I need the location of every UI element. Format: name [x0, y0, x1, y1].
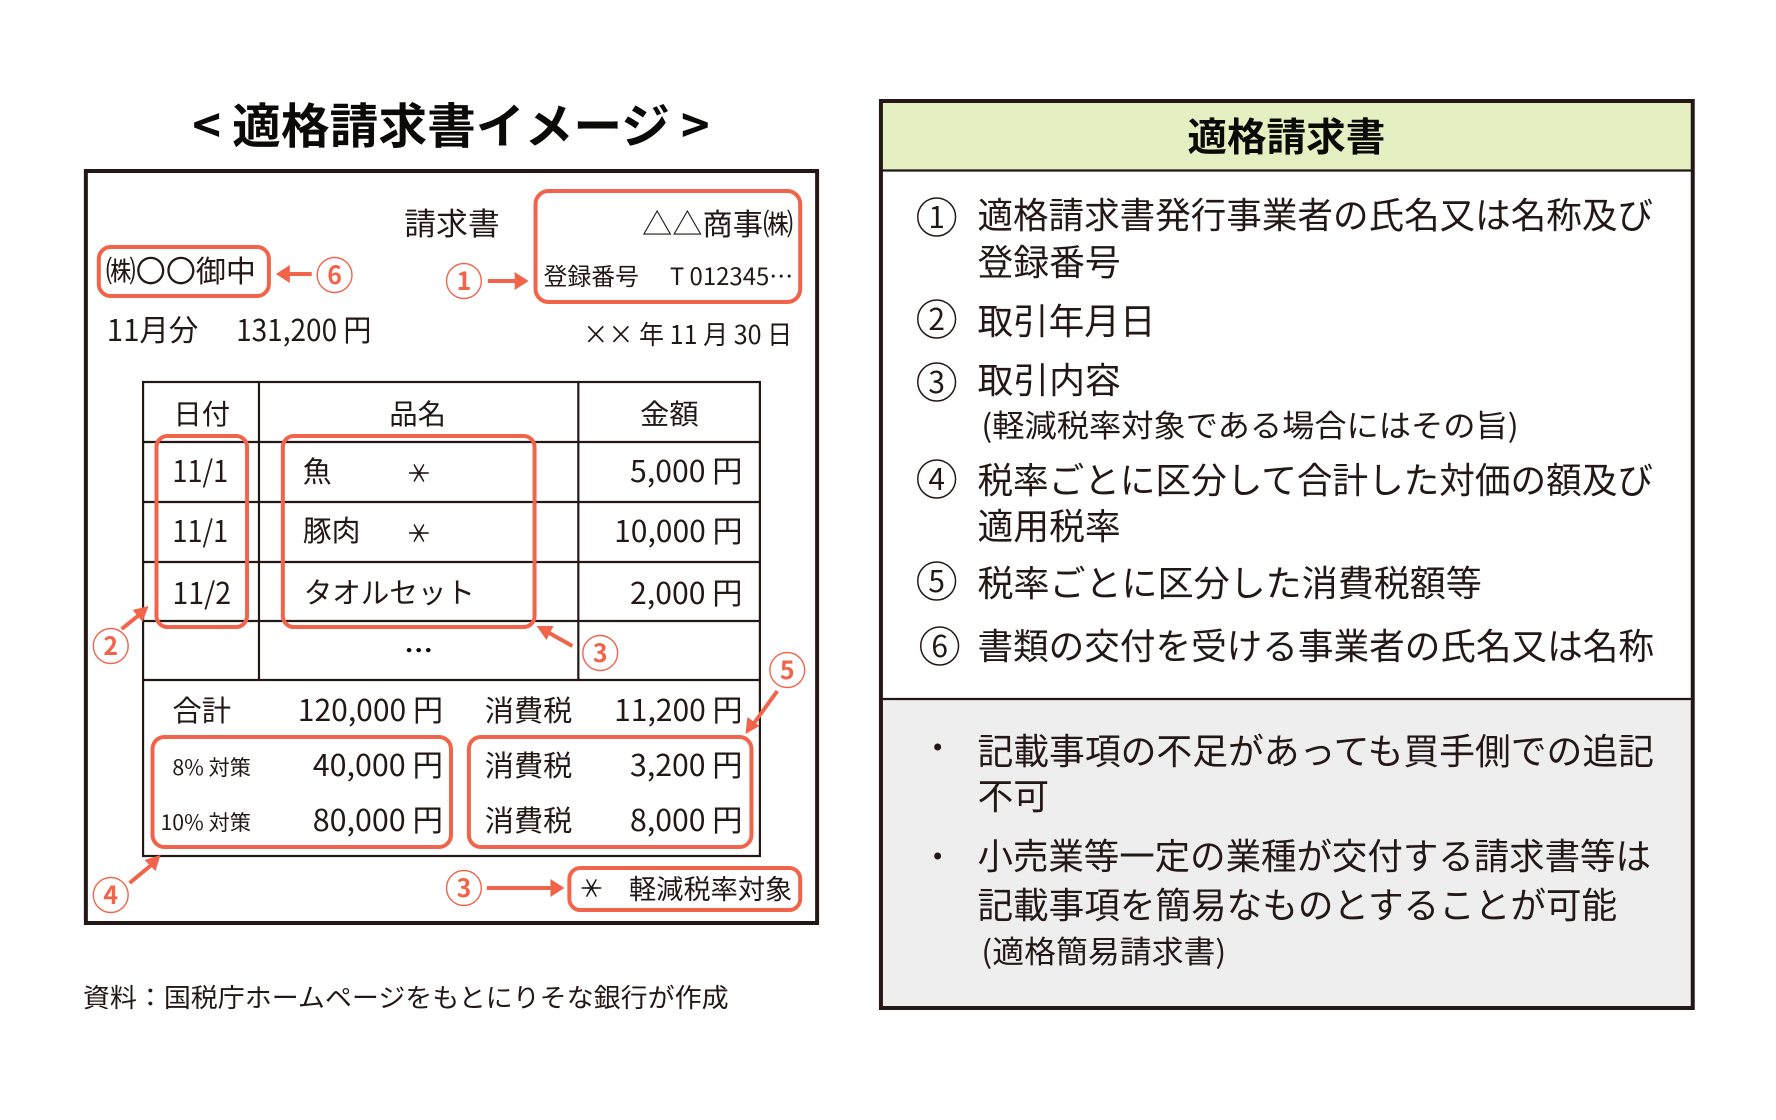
list item 6: 書類の交付を受ける事業者の氏名又は名称	[977, 618, 1654, 670]
table header	[173, 393, 699, 433]
table amounts	[614, 447, 742, 613]
invoice heading: 請求書	[404, 199, 500, 244]
arrow and marker 4: 4	[103, 876, 118, 912]
totals row: 11,200 円	[614, 686, 742, 730]
bullet note 2: 小売業等一定の業種が交付する請求書等は	[977, 828, 1651, 880]
callout box: issuer and registration number	[536, 191, 800, 302]
callout box: taxable amount by rate: 10% 対策	[160, 807, 251, 837]
table header: 日付	[173, 393, 230, 433]
callout box: issuer and registration number: 登録番号	[544, 257, 639, 292]
totals row	[172, 686, 742, 730]
bullet note 1: 不可	[977, 768, 1049, 820]
list item 2: 2	[928, 295, 945, 339]
table amounts: 10,000 円	[614, 507, 742, 551]
arrow and marker 2	[93, 606, 149, 664]
bullet note 1	[934, 723, 1654, 820]
panel: requirements	[881, 101, 1693, 1008]
table dates: 11/2	[172, 569, 231, 613]
table amounts: 5,000 円	[630, 447, 742, 491]
bullet note 1: 記載事項の不足があっても買手側での追記	[977, 723, 1654, 775]
callout box: issuer and registration number: △△商事㈱	[642, 200, 793, 244]
callout box: transaction dates	[157, 436, 247, 627]
callout box: addressee: ㈱〇〇御中	[106, 247, 256, 291]
panel grey section	[881, 699, 1693, 1008]
list item 2: 取引年月日	[977, 293, 1156, 345]
list item 3	[918, 352, 1519, 446]
arrow and marker 3 lower: 3	[457, 869, 471, 905]
list item 4: 適用税率	[977, 498, 1121, 550]
callout box: taxable amount by rate	[153, 737, 451, 847]
table header: 金額	[640, 393, 699, 433]
list item 3: 取引内容	[977, 352, 1121, 404]
callout box: taxable amount by rate: 8% 対策	[172, 752, 251, 782]
callout box: taxable amount by rate: 80,000 円	[313, 796, 443, 840]
bullet note 2: (適格簡易請求書)	[981, 927, 1226, 972]
arrow and marker 5	[745, 651, 805, 734]
callout box: issuer and registration number: T 012345…	[670, 257, 793, 292]
totals row: 消費税	[485, 688, 572, 730]
arrow and marker 3 upper	[537, 626, 618, 670]
total amount: 131,200 円	[236, 306, 371, 350]
list item 4	[918, 452, 1653, 550]
callout box: consumption tax by rate: 消費税	[485, 743, 572, 785]
list item 5: 税率ごとに区分した消費税額等	[977, 555, 1482, 607]
total amount: 11月分	[107, 306, 198, 350]
arrow and marker 1	[447, 262, 529, 298]
panel outline	[881, 101, 1693, 1008]
arrow and marker 4	[93, 855, 160, 912]
total amount	[107, 306, 371, 350]
table item names: ＊	[401, 460, 438, 486]
list item 6: 6	[931, 622, 948, 666]
callout box: reduced tax rate note	[569, 868, 800, 910]
arrow and marker 1: 1	[457, 262, 471, 298]
arrow and marker 6: 6	[327, 256, 342, 292]
callout box: reduced tax rate note: ＊	[573, 875, 610, 901]
arrow and marker 2: 2	[103, 627, 118, 663]
invoice date: ×× 年 11 月 30 日	[583, 315, 792, 352]
source note: 資料：国税庁ホームページをもとにりそな銀行が作成	[83, 978, 729, 1015]
table dates: 11/1	[172, 447, 228, 491]
arrow and marker 6	[276, 256, 352, 292]
list item 3: (軽減税率対象である場合にはその旨)	[981, 401, 1519, 446]
table header: 品名	[389, 393, 446, 433]
table item names: タオルセット	[304, 570, 475, 612]
panel: invoice image frame	[86, 171, 817, 923]
list item 1	[918, 187, 1653, 286]
list item 4: 税率ごとに区分して合計した対価の額及び	[977, 452, 1653, 504]
totals row: 120,000 円	[298, 686, 443, 730]
arrow and marker 3 lower	[447, 869, 564, 906]
panel header background	[881, 101, 1693, 170]
table item names	[303, 449, 475, 668]
table grid	[143, 382, 760, 856]
callout box: consumption tax by rate: 3,200 円	[630, 741, 742, 785]
list item 1: 1	[928, 193, 945, 237]
list item 1: 登録番号	[977, 234, 1121, 286]
table item names: 豚肉	[303, 508, 360, 550]
table item names: ＊	[401, 520, 438, 546]
table amounts: 2,000 円	[630, 569, 742, 613]
table dates	[172, 447, 231, 613]
list item 1: 適格請求書発行事業者の氏名又は名称及び	[977, 187, 1653, 239]
table dates: 11/1	[172, 507, 228, 551]
callout box: reduced tax rate note: 軽減税率対象	[629, 868, 792, 907]
table item names: …	[404, 631, 433, 668]
callout box: transaction items	[283, 436, 535, 627]
callout box: consumption tax by rate	[469, 737, 751, 847]
list item 4: 4	[928, 455, 945, 499]
bullet note 2	[934, 828, 1651, 972]
arrow and marker 5: 5	[780, 651, 795, 687]
bullet note 2: 記載事項を簡易なものとすることが可能	[977, 877, 1617, 929]
panel heading: 適格請求書	[1187, 107, 1385, 163]
list item 3: 3	[928, 358, 945, 402]
callout box: consumption tax by rate: 8,000 円	[630, 796, 742, 840]
arrow and marker 3 upper: 3	[593, 634, 608, 670]
callout box: taxable amount by rate: 40,000 円	[313, 741, 443, 785]
totals row: 合計	[172, 688, 231, 730]
title: < 適格請求書イメージ >	[192, 87, 710, 157]
list item 5: 5	[928, 557, 945, 601]
callout box: consumption tax by rate: 消費税	[485, 798, 572, 840]
table item names: 魚	[303, 449, 332, 491]
